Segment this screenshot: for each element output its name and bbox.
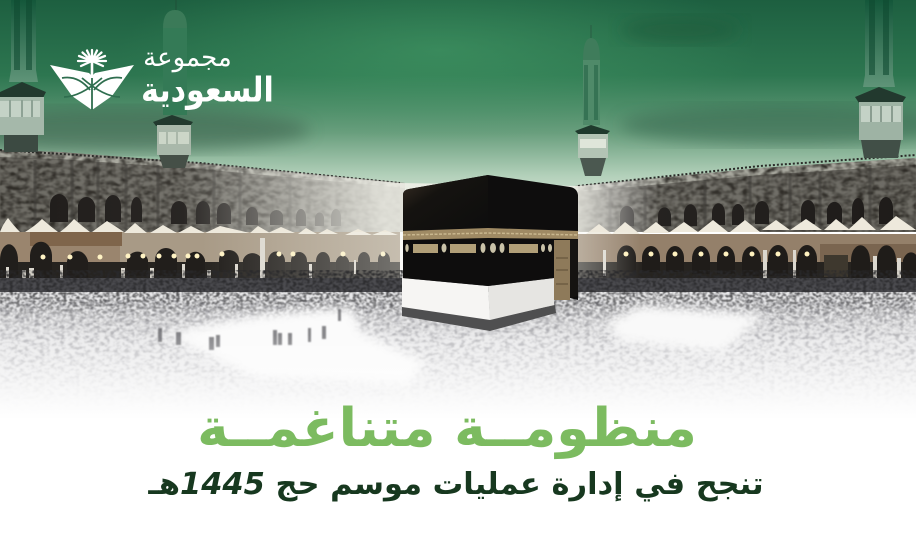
- lower arcade left: [0, 218, 400, 298]
- white lower band: [402, 278, 490, 320]
- gold plaques: [413, 244, 538, 253]
- minaret right centre: [575, 25, 610, 176]
- minaret far left: [0, 0, 46, 152]
- lanterns: [405, 243, 574, 253]
- wings: [50, 65, 134, 110]
- hero illustration: Kaaba and Grand Mosque: [0, 0, 916, 398]
- title: منظومــة متناغمــة: [197, 396, 697, 459]
- logo emblem: [50, 50, 134, 110]
- lower arcade haze: [0, 232, 916, 282]
- sunlit kiswa top: [403, 175, 488, 231]
- crowd: [0, 270, 916, 398]
- logo text: group name: مجموعة: [143, 43, 232, 73]
- minaret second left: [153, 0, 193, 168]
- door curtain: [554, 240, 570, 300]
- sky: [0, 0, 916, 215]
- marble floor: [158, 305, 765, 385]
- base: [402, 305, 556, 331]
- logo text: Saudia: السعودية: [141, 70, 274, 111]
- lower arcade right: [578, 216, 916, 284]
- sword and feather cuts: [62, 78, 122, 110]
- subtitle: تنجح في إدارة عمليات موسم حج 1445هـ: [148, 467, 764, 502]
- Kaaba: [402, 175, 578, 331]
- upper gallery left: [0, 150, 405, 232]
- minaret far right: [855, 0, 906, 158]
- gold belt: [403, 228, 578, 240]
- upper gallery right: [575, 150, 916, 232]
- upper gallery haze: [0, 150, 916, 232]
- white fade: [0, 335, 916, 420]
- black kiswa: [403, 175, 578, 300]
- palm: [78, 50, 106, 76]
